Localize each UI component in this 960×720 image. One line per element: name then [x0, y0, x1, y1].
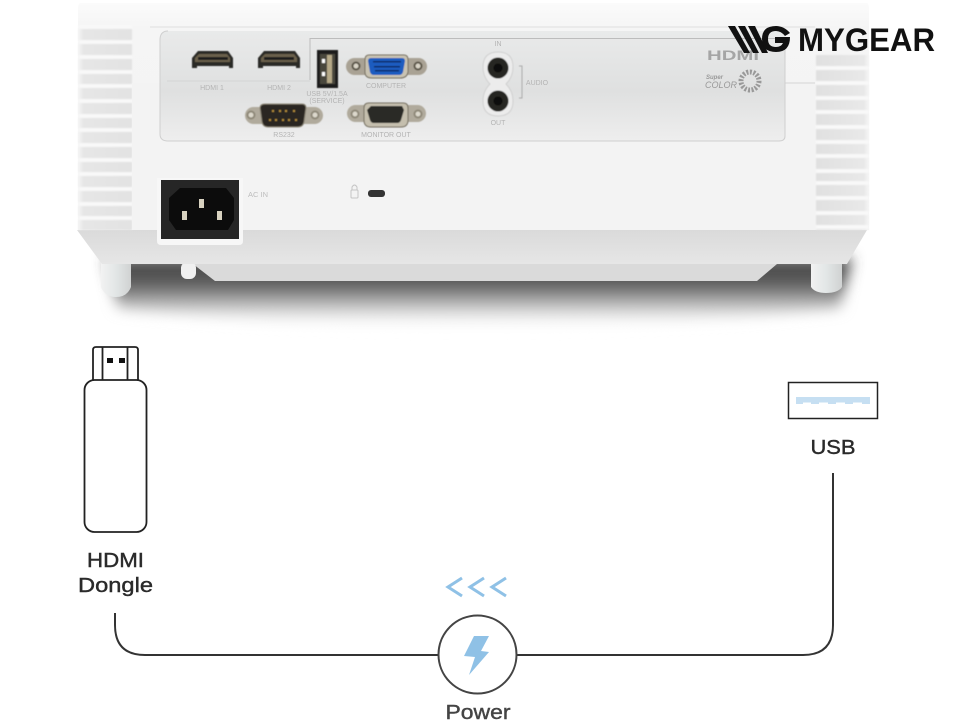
port labels: (SERVICE)	[309, 98, 345, 105]
VGA computer port	[346, 55, 427, 78]
security lock	[351, 185, 385, 198]
label: HDMI Dongle: HDMI	[87, 550, 144, 572]
body main	[78, 0, 869, 230]
icon: HDMI dongle	[84, 347, 146, 532]
brand logo	[728, 22, 935, 58]
VGA monitor out port	[347, 103, 426, 127]
logo mark	[728, 26, 790, 53]
HDMI port 2	[258, 51, 300, 68]
port labels: USB 5V/1.5A	[306, 91, 348, 98]
port labels: OUT	[491, 120, 506, 127]
port labels: MONITOR OUT	[361, 132, 412, 139]
SuperColor logo: Super	[706, 75, 724, 81]
foot: left	[101, 262, 131, 297]
RS232 port	[245, 104, 323, 127]
port labels: HDMI 1	[200, 85, 224, 92]
arrows: direction chevrons	[448, 578, 506, 596]
label: USB: USB	[810, 437, 856, 459]
connector panel	[160, 31, 785, 141]
icon: USB port	[788, 382, 878, 418]
audio jacks	[483, 52, 522, 116]
port labels	[200, 41, 549, 139]
SuperColor logo: COLOR	[705, 80, 738, 90]
logo wordmark: MYGEAR	[798, 22, 935, 58]
AC power socket	[157, 178, 243, 245]
USB port	[317, 50, 338, 88]
port labels: COMPUTER	[366, 83, 406, 90]
vent: right	[816, 55, 869, 230]
SuperColor logo	[705, 72, 759, 90]
port labels: HDMI 2	[267, 85, 291, 92]
icon: power circle	[438, 616, 516, 694]
body lower band	[77, 230, 867, 264]
vent: left	[78, 25, 132, 230]
foot: right	[811, 262, 842, 293]
AC IN label: AC IN	[248, 190, 268, 199]
port labels: RS232	[273, 132, 295, 139]
underside platform	[193, 264, 777, 281]
foot: small	[181, 262, 196, 279]
label: HDMI Dongle	[78, 550, 153, 597]
port labels: AUDIO	[526, 80, 549, 87]
floor shadow	[106, 258, 852, 324]
label: HDMI Dongle: Dongle	[78, 575, 153, 597]
connector line	[115, 473, 833, 655]
projector rear photo	[0, 0, 960, 324]
port labels: IN	[494, 41, 502, 48]
rear body inset	[132, 83, 815, 230]
HDMI port 1	[192, 51, 233, 68]
HDMI logo: HDMI	[707, 47, 759, 63]
